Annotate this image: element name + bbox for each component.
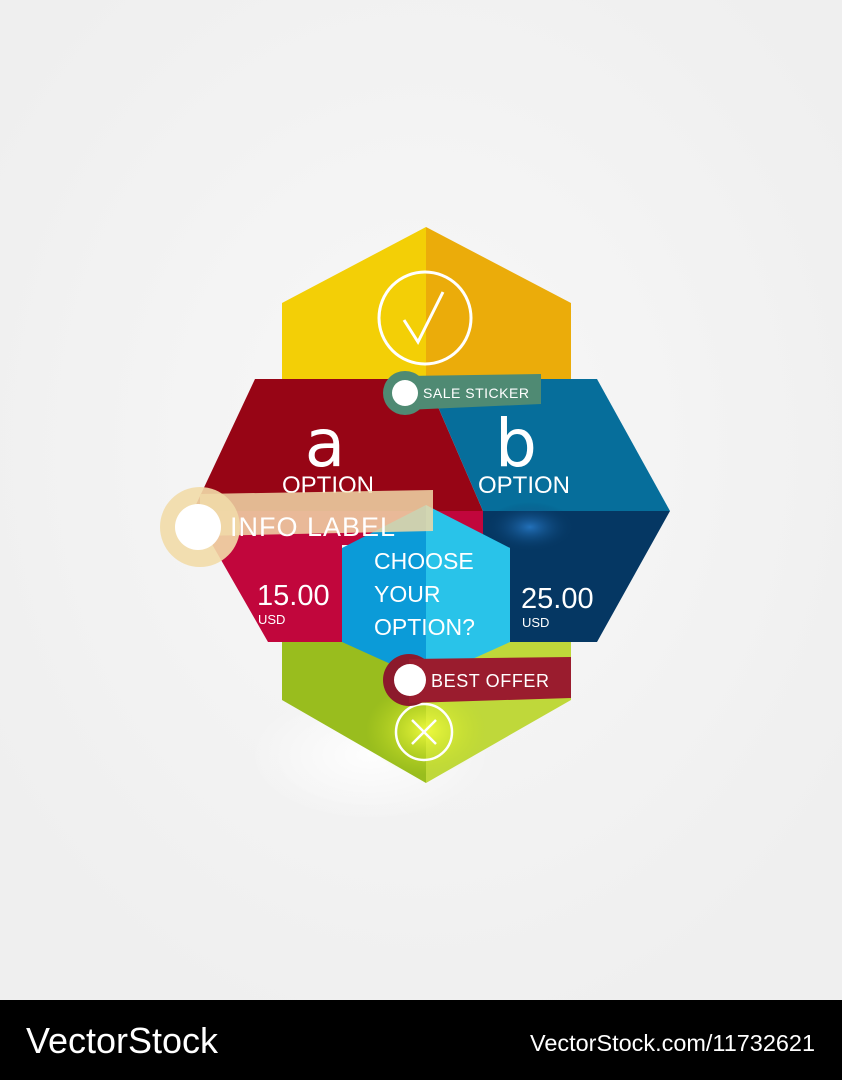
panel: choose your option: CHOOSE (374, 548, 474, 574)
callout: info label (160, 487, 433, 567)
panel: option b (426, 379, 670, 642)
panel: option a: USD (258, 612, 285, 627)
panel: option a: a (305, 405, 345, 482)
icon: cross circle (396, 704, 452, 760)
panel: top yellow (check) (282, 227, 571, 380)
callout: best offer: BEST OFFER (431, 671, 549, 691)
panel: option b: 25.00 (521, 583, 594, 615)
panel: choose your option (342, 505, 510, 680)
panel: choose your option: YOUR (374, 581, 440, 607)
footer bar: VectorStock (26, 1020, 219, 1061)
panel: option b: USD (522, 615, 549, 630)
callout: sale sticker: SALE STICKER (423, 385, 529, 401)
footer bar: VectorStock.com/11732621 (530, 1030, 815, 1056)
icon: check circle (379, 272, 471, 364)
panel: option b: OPTION (478, 472, 570, 499)
soft shadow (250, 690, 490, 820)
panel: option b: b (495, 405, 537, 482)
callout: info label: INFO LABEL (230, 512, 395, 542)
panel: option a (193, 379, 483, 642)
panel: option a: OPTION (282, 472, 374, 499)
panel: choose your option: OPTION? (374, 614, 475, 640)
callout: sale sticker (383, 371, 541, 415)
panel: bottom green (cross) (282, 640, 571, 783)
panel: option a: 15.00 (257, 580, 330, 612)
footer bar (0, 1000, 842, 1080)
callout: best offer (383, 654, 571, 706)
